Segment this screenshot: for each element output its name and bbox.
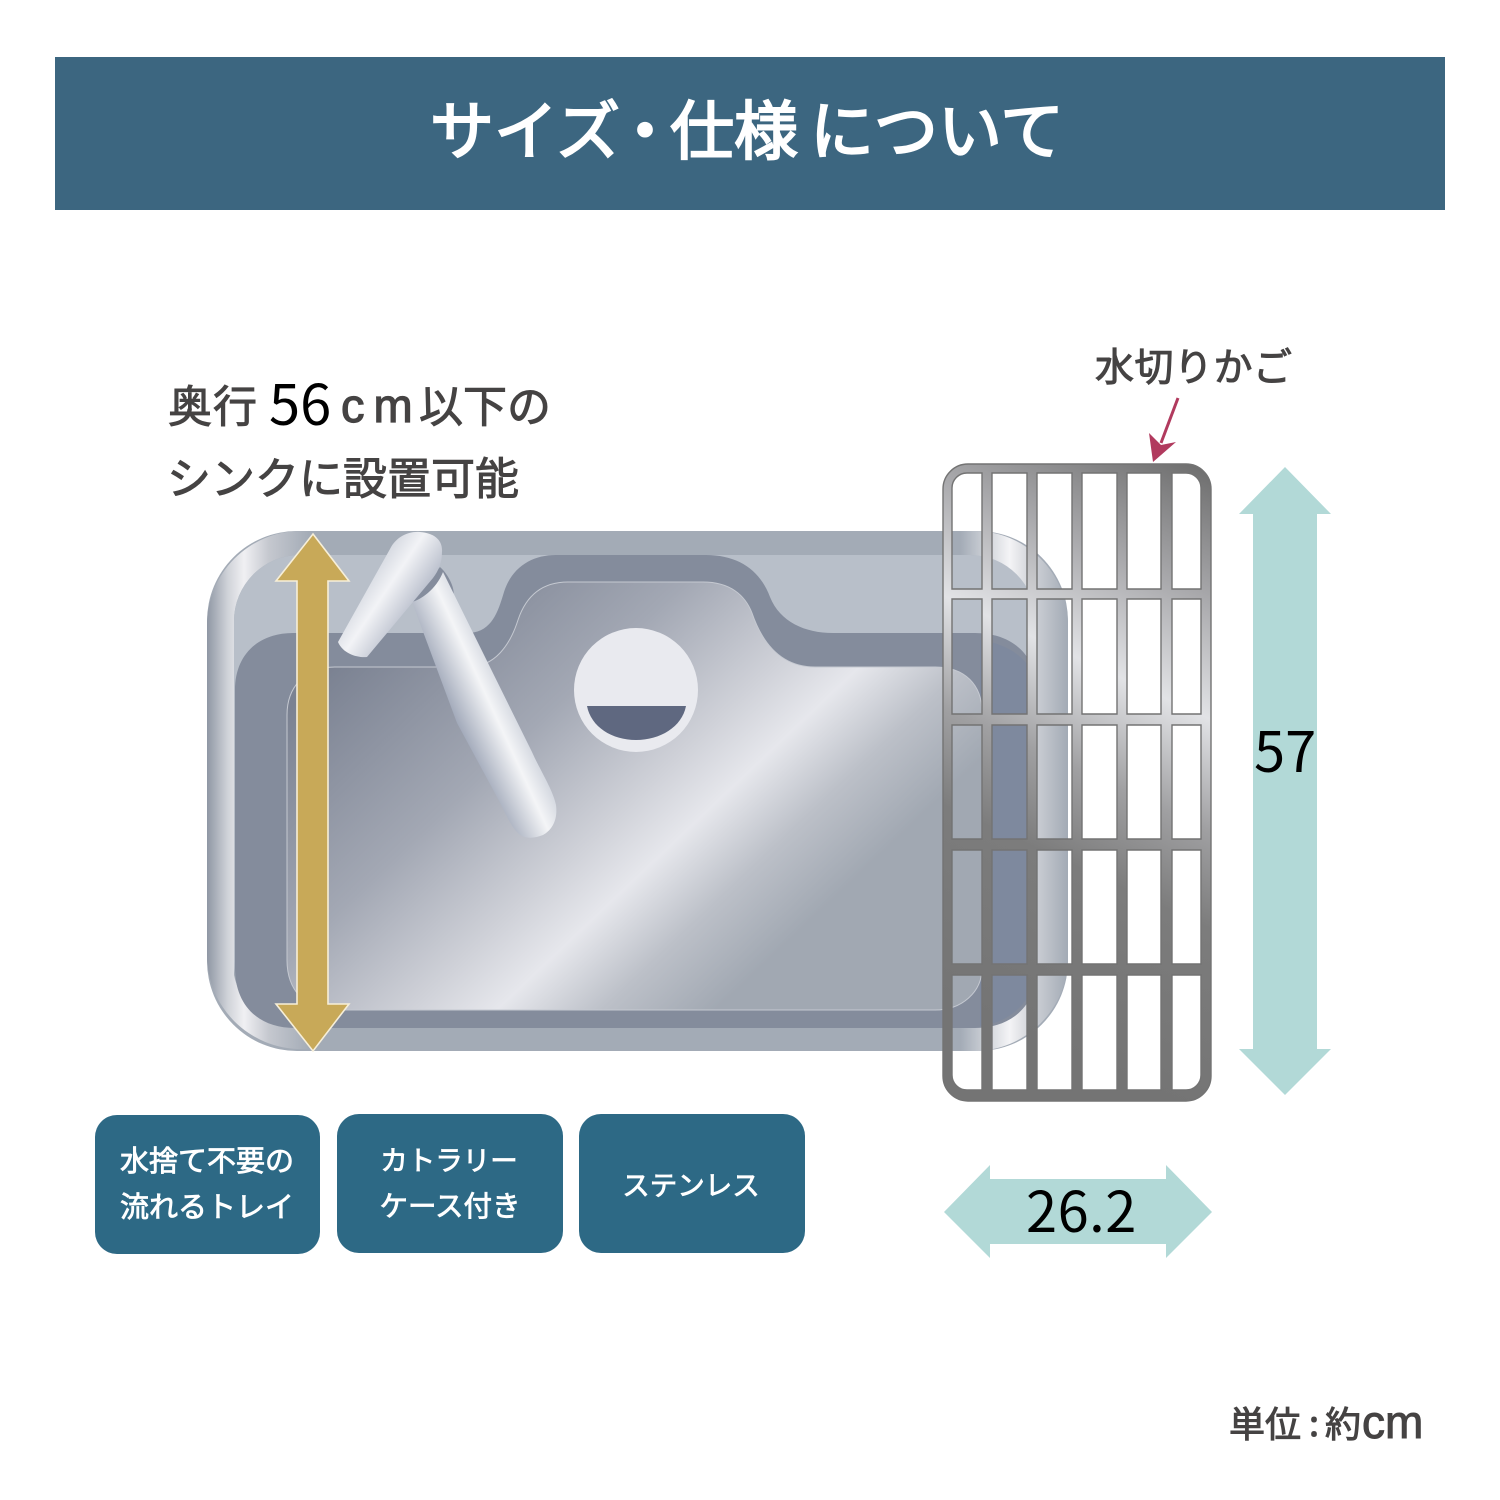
feature badge: tray: 流れるトレイ [120, 1184, 294, 1226]
heading: depth note: 56 [269, 361, 331, 442]
title banner [55, 57, 1445, 210]
sink illustration [207, 531, 1068, 1051]
unit note: 単位 [1229, 1396, 1301, 1448]
sink rim [207, 531, 1068, 1051]
arrow: points to rack [1149, 398, 1178, 462]
width arrow with value: 26.2 [1026, 1168, 1137, 1249]
feature badge: stainless: ステンレス [622, 1163, 760, 1203]
height arrow with value: 57 [1254, 708, 1316, 789]
height arrow with value [1239, 467, 1331, 1095]
feature badge: cutlery case: ケース付き [379, 1184, 521, 1225]
drying rack [943, 464, 1211, 1101]
feature badge: cutlery case [337, 1114, 563, 1253]
title: 仕様 [670, 81, 798, 173]
sink deck [234, 555, 1036, 1028]
feature badge: tray: 水捨て不要の [120, 1138, 294, 1180]
heading: depth note: cm [341, 379, 422, 432]
unit note: : [1309, 1395, 1319, 1447]
unit note: 約 [1325, 1396, 1361, 1448]
feature badge: cutlery case: カトラリー [380, 1138, 518, 1178]
width arrow with value [944, 1165, 1212, 1258]
heading: depth note: シンクに設置可能 [167, 443, 519, 507]
unit note [1229, 1395, 1423, 1448]
faucet [338, 532, 556, 838]
sink floor [287, 582, 982, 1010]
heading: depth note: 奥行 [168, 371, 258, 435]
feature badge: tray [95, 1115, 320, 1254]
heading: depth note [167, 361, 551, 507]
heading: depth note: 以下の [419, 371, 551, 435]
drain [574, 628, 698, 752]
unit note: cm [1362, 1396, 1423, 1448]
title: ・ [613, 81, 677, 173]
title: について [810, 81, 1064, 173]
rack label: 水切りかご [1095, 337, 1293, 393]
title: サイズ [430, 81, 620, 173]
sink basin wall [235, 555, 1037, 1028]
gold depth arrow [276, 534, 349, 1051]
feature badge: stainless [579, 1114, 805, 1253]
